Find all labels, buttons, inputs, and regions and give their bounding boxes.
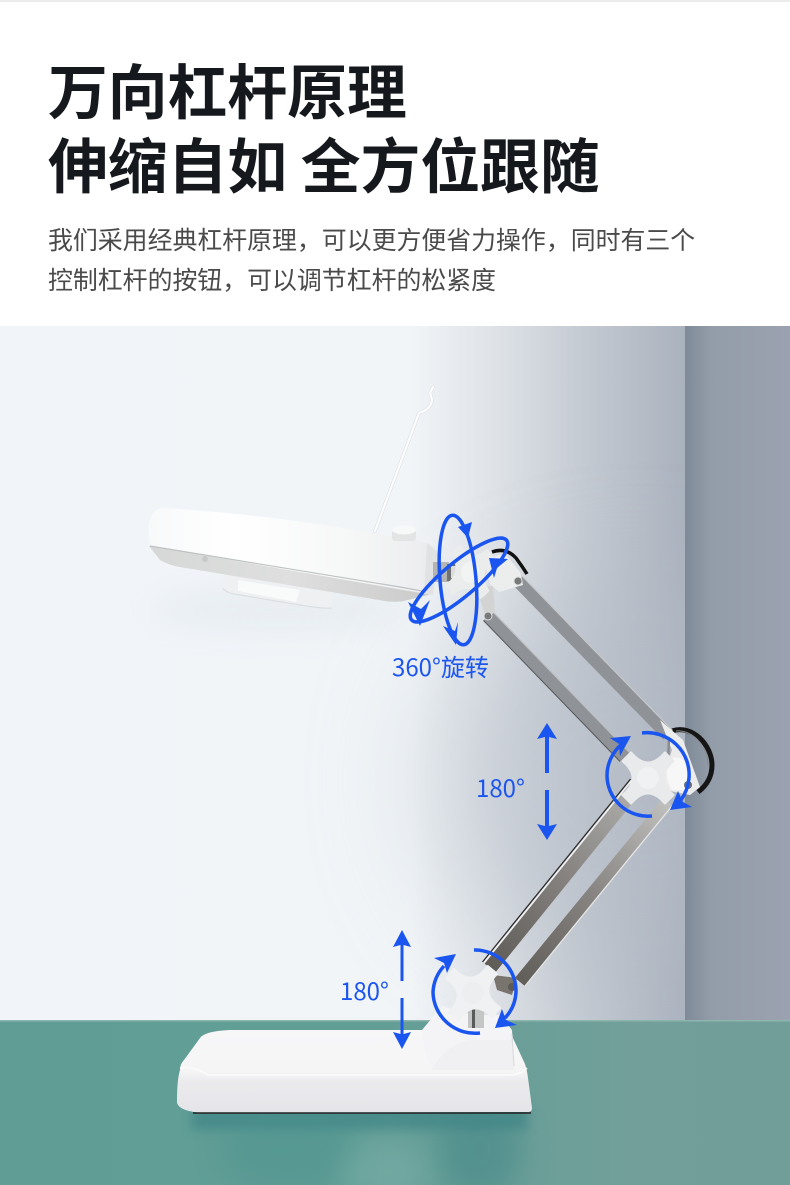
label: elbow 180 degrees: 180° [476, 769, 525, 804]
lower arm rear [520, 802, 672, 986]
lower arm front [482, 779, 638, 968]
label: 360 degree rotation: 360°旋转 [392, 648, 489, 683]
upper arm two [484, 612, 630, 762]
icon: base rotation arrow [433, 950, 517, 1033]
description text: 控制杠杆的按钮，可以调节杠杆的松紧度 [48, 261, 496, 297]
lamp base [177, 1030, 532, 1113]
illustration: magnifier lamp [148, 387, 712, 1113]
arm screws [484, 577, 522, 620]
lamp head underside [149, 546, 432, 602]
panel: wall background [0, 326, 790, 1020]
icon: base double arrow [393, 930, 411, 1049]
upper arm one [518, 576, 672, 735]
description text: 我们采用经典杠杆原理，可以更方便省力操作，同时有三个 [48, 221, 695, 257]
lens [223, 573, 334, 608]
elbow joint star [623, 753, 673, 803]
icon: elbow double arrow [537, 723, 557, 840]
panel: table surface [0, 1020, 790, 1185]
adjuster knob [392, 526, 416, 541]
base joint metal [468, 975, 517, 1028]
head screw [202, 556, 208, 562]
metal swivel connector [433, 562, 461, 582]
top hairline [0, 0, 790, 2]
swivel joint star [446, 546, 494, 598]
title: 万向杠杆原理 [48, 46, 407, 132]
title [48, 46, 600, 206]
elbow bracket [660, 720, 700, 795]
lamp support rod [375, 387, 433, 531]
icon: 360 degree rotation rings [401, 514, 517, 646]
icon: elbow rotation arrow [607, 733, 692, 816]
label: base 180 degrees: 180° [340, 972, 389, 1007]
description text [48, 221, 695, 297]
power cable at elbow [672, 730, 712, 792]
base joint star [446, 966, 500, 1020]
lower bracket [473, 586, 495, 619]
lamp head side edge [424, 543, 438, 595]
power cable at head [492, 550, 527, 574]
lamp head body [148, 508, 438, 595]
base mount [422, 1006, 514, 1070]
upper bracket [486, 555, 523, 592]
title: 伸缩自如 全方位跟随 [48, 120, 600, 206]
